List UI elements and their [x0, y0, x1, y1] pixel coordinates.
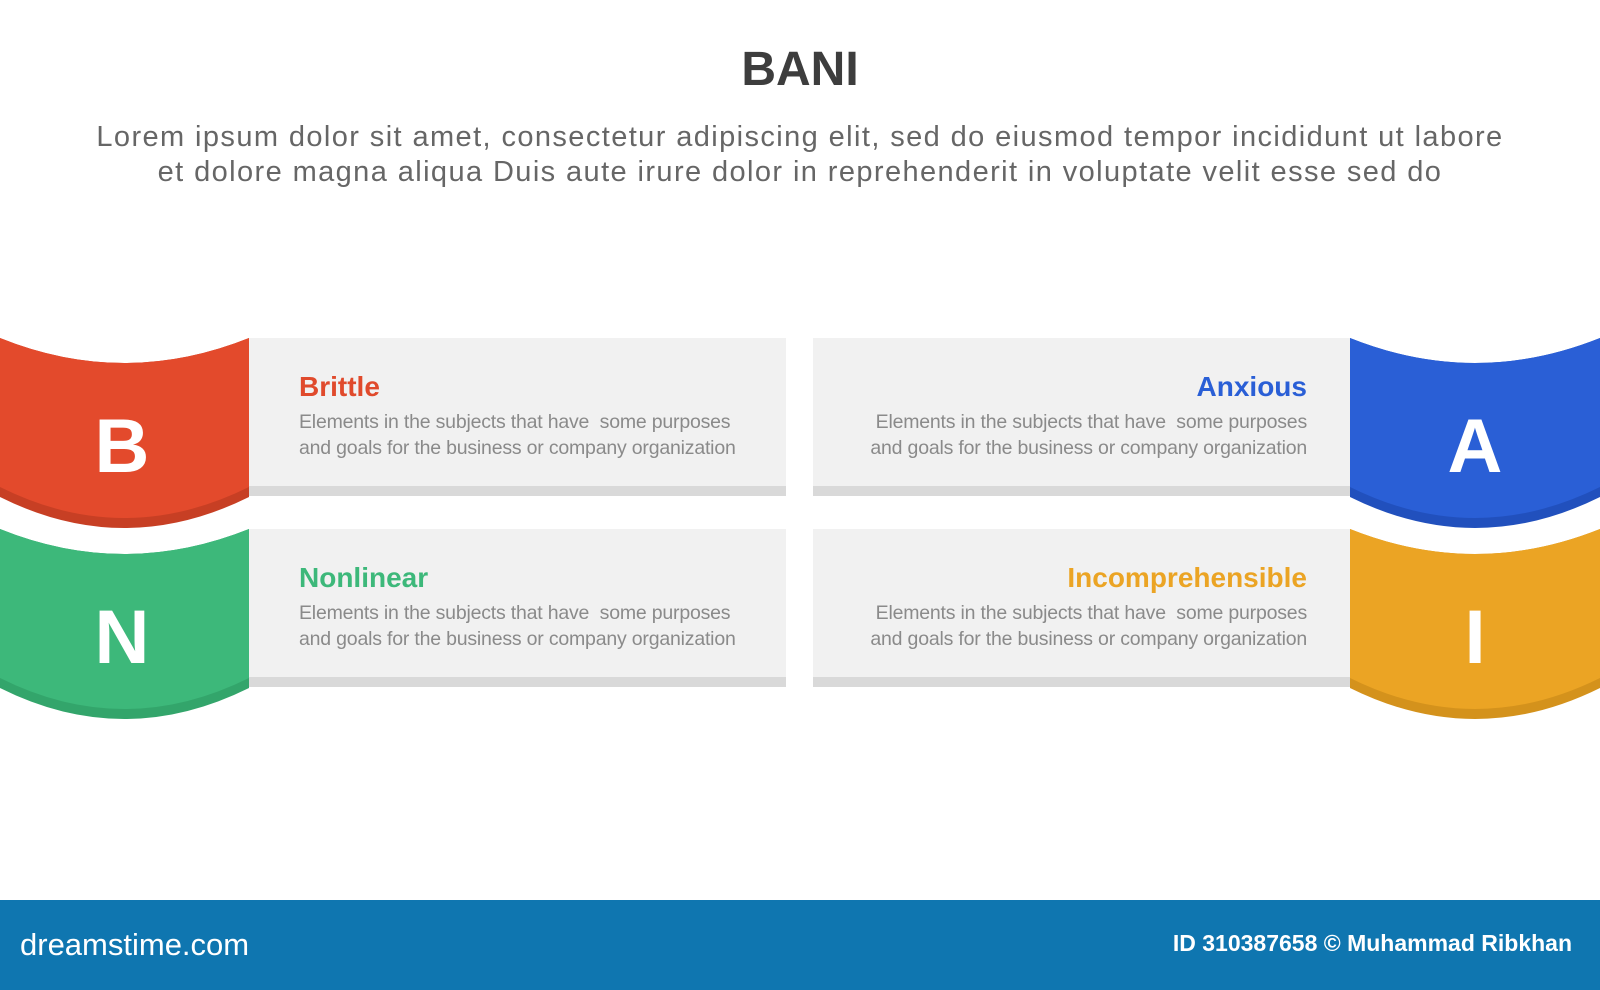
ribbon I	[1350, 529, 1600, 719]
panel: nonlinear: Nonlinear	[299, 562, 428, 593]
panel: anxious: Elements in the subjects that have some purposes	[876, 411, 1307, 433]
title: BANI	[741, 43, 859, 96]
panel: incomprehensible: and goals for the business or company organization	[870, 628, 1307, 650]
panel: incomprehensible: Elements in the subjects that have some purposes	[876, 602, 1307, 624]
ribbon B	[0, 338, 249, 528]
footer bar	[0, 900, 1600, 990]
footer credit: ID 310387658 © Muhammad Ribkhan	[1173, 930, 1572, 956]
panel: nonlinear: Elements in the subjects that have some purposes	[299, 602, 730, 624]
ribbon N: N	[95, 595, 149, 680]
panel: brittle: Elements in the subjects that have some purposes	[299, 411, 730, 433]
panel: nonlinear: and goals for the business or company organization	[299, 628, 736, 650]
ribbon A: A	[1448, 404, 1502, 489]
ribbon N	[0, 529, 249, 719]
panel: anxious: Anxious	[1197, 371, 1307, 402]
panel: incomprehensible	[813, 529, 1350, 687]
panel: anxious: and goals for the business or company organization	[870, 437, 1307, 459]
panel: brittle: Brittle	[299, 371, 380, 402]
panel: nonlinear	[249, 529, 786, 687]
ribbon I: I	[1464, 595, 1486, 680]
panel: anxious	[813, 338, 1350, 496]
subtitle: Lorem ipsum dolor sit amet, consectetur adipiscing elit, sed do eiusmod tempor incididunt ut labore	[96, 121, 1504, 153]
subtitle: et dolore magna aliqua Duis aute irure dolor in reprehenderit in voluptate velit esse sed do	[158, 156, 1442, 188]
panel: incomprehensible: Incomprehensible	[1067, 562, 1307, 593]
ribbon B: B	[95, 404, 149, 489]
panel: brittle	[249, 338, 786, 496]
ribbon A	[1350, 338, 1600, 528]
subtitle	[96, 121, 1504, 188]
panel: brittle: and goals for the business or company organization	[299, 437, 736, 459]
footer logo: dreamstime.com	[20, 927, 249, 962]
